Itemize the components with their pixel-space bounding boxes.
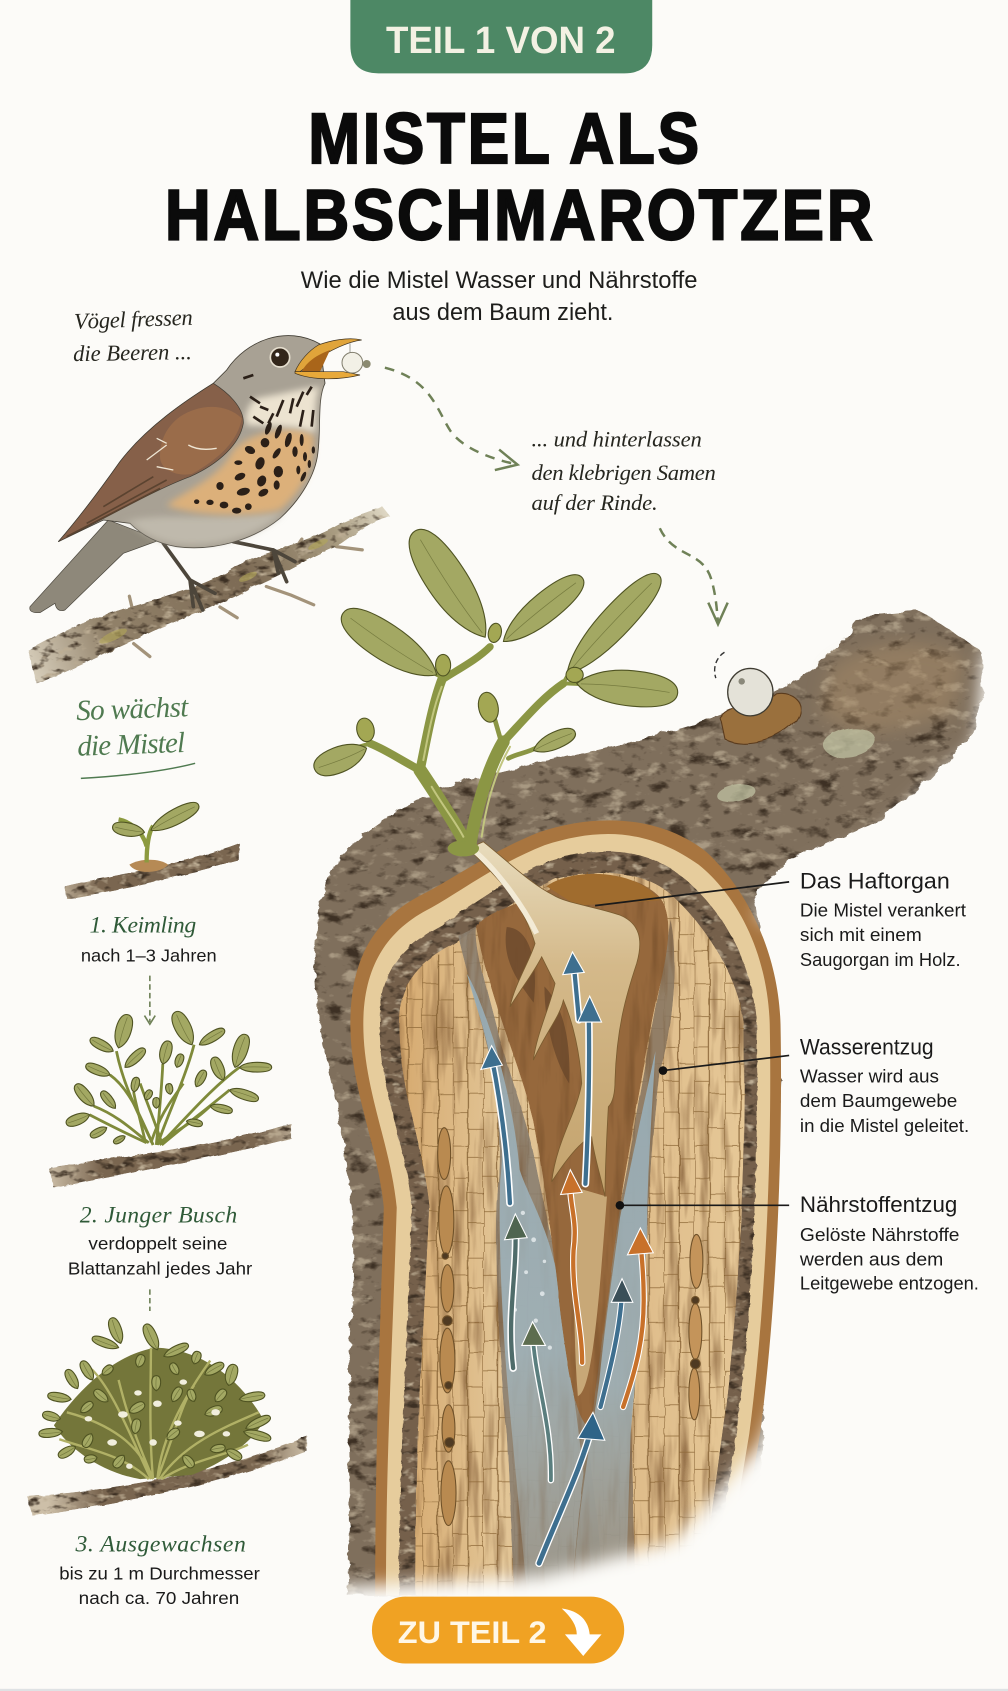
left water channel bbox=[467, 974, 595, 1606]
note: birds eat the berries bbox=[73, 305, 193, 366]
bird throat bbox=[246, 387, 320, 433]
label: Wasserentzug: Wasser wird aus bbox=[800, 1065, 939, 1086]
mistletoe bbox=[310, 520, 679, 856]
outer brown ring bbox=[350, 820, 781, 1596]
bird eye bbox=[270, 348, 290, 367]
bush 2 stems bbox=[89, 1045, 239, 1145]
arrow: stage 1 to 2 bbox=[144, 976, 155, 1024]
bush 3 mass bbox=[54, 1348, 264, 1479]
stage 2 caption: Blattanzahl jedes Jahr bbox=[68, 1258, 252, 1278]
mistletoe leaves bbox=[397, 520, 502, 649]
stage 3 caption bbox=[59, 1531, 260, 1608]
bush 2 branch bbox=[49, 1123, 291, 1188]
badge: Teil 1 von 2: TEIL 1 VON 2 bbox=[386, 19, 616, 61]
stage 3 caption: nach ca. 70 Jahren bbox=[79, 1588, 239, 1608]
label: Naehrstoffentzug: Nährstoffentzug bbox=[800, 1192, 957, 1217]
label: Wasserentzug bbox=[800, 1034, 969, 1136]
badge: Teil 1 von 2 bbox=[350, 0, 652, 73]
title: MISTEL ALS bbox=[308, 100, 702, 179]
stage 2 caption bbox=[68, 1203, 252, 1278]
water speckles bbox=[514, 1211, 552, 1350]
bush 3 branch bbox=[27, 1436, 307, 1516]
label: Das Haftorgan: Das Haftorgan bbox=[800, 868, 950, 893]
title bbox=[165, 100, 875, 255]
stage 3 caption: bis zu 1 m Durchmesser bbox=[59, 1563, 260, 1583]
bird body bbox=[58, 336, 325, 548]
mistletoe stems bbox=[357, 647, 583, 856]
cavity shade bbox=[506, 927, 569, 1083]
label: Naehrstoffentzug bbox=[799, 1192, 979, 1293]
resin chain left bbox=[438, 1128, 456, 1525]
label: Naehrstoffentzug: Leitgewebe entzogen. bbox=[800, 1272, 979, 1293]
cream ring bbox=[363, 834, 770, 1596]
label: Das Haftorgan: Die Mistel verankert bbox=[800, 899, 967, 920]
left grey band bbox=[458, 927, 604, 1606]
arrow: water 8 bbox=[600, 1279, 633, 1407]
stage 3 caption: 3. Ausgewachsen bbox=[74, 1531, 246, 1557]
arrow: water 1 bbox=[481, 1046, 510, 1203]
seed on bark bbox=[720, 668, 800, 743]
note: leave the sticky seed bbox=[531, 426, 716, 515]
note: leave the sticky seed: den klebrigen Samen bbox=[531, 460, 716, 485]
dashed arrow: bird to note bbox=[385, 368, 517, 470]
note: birds eat the berries: die Beeren ... bbox=[73, 339, 192, 366]
arrow: water 3 bbox=[578, 996, 602, 1184]
connector: stage 2 to 3 bbox=[149, 1289, 151, 1311]
leader: Haftorgan bbox=[595, 882, 789, 906]
bird belly bbox=[122, 512, 283, 545]
bush 3 leaves bbox=[106, 1316, 126, 1345]
button: Zu Teil 2: ZU TEIL 2 bbox=[398, 1615, 547, 1650]
stage 3 illustration: mature bush bbox=[27, 1316, 307, 1516]
leader: Naehrstoffentzug bbox=[616, 1201, 789, 1210]
bush 3 berries bbox=[85, 1379, 230, 1469]
title: HALBSCHMAROTZER bbox=[165, 176, 875, 255]
arrow: nutrients 6 bbox=[561, 1170, 582, 1363]
arrow: water 2 bbox=[563, 952, 584, 1020]
resin chain right bbox=[689, 1234, 703, 1420]
bark end tint bbox=[819, 643, 965, 732]
arrow: nutrients 7 bbox=[623, 1228, 653, 1407]
label: Wasserentzug: Wasserentzug bbox=[800, 1034, 934, 1059]
wood cells bbox=[399, 873, 744, 1596]
heading: So waechst die Mistel bbox=[76, 691, 195, 778]
heading: So waechst die Mistel: die Mistel bbox=[77, 727, 186, 763]
bark bbox=[315, 610, 983, 1596]
flow arrows bbox=[481, 952, 653, 1563]
subtitle: Wie die Mistel Wasser und Nährstoffe bbox=[301, 267, 698, 294]
subtitle bbox=[301, 267, 698, 326]
bush 2 leaves bbox=[111, 1013, 135, 1050]
heading: So waechst die Mistel: So wächst bbox=[76, 691, 190, 727]
dark ring bbox=[379, 851, 757, 1596]
subtitle: aus dem Baum zieht. bbox=[392, 299, 613, 326]
right water channel bbox=[571, 1051, 655, 1606]
bird bbox=[30, 336, 371, 613]
trunk cross-section bbox=[315, 610, 983, 1690]
note: birds eat the berries: Vögel fressen bbox=[74, 305, 193, 334]
bird beak bbox=[295, 339, 362, 379]
bird chest bbox=[167, 429, 314, 515]
stage 1 caption: nach 1–3 Jahren bbox=[81, 946, 217, 966]
right grey band bbox=[571, 920, 674, 1606]
arrow: sap 5 bbox=[522, 1322, 551, 1480]
label: Naehrstoffentzug: Gelöste Nährstoffe bbox=[800, 1224, 959, 1245]
label: Wasserentzug: in die Mistel geleitet. bbox=[800, 1115, 969, 1136]
leader: Wasserentzug bbox=[659, 1055, 789, 1075]
label: Das Haftorgan: Saugorgan im Holz. bbox=[800, 949, 961, 970]
lichen patches bbox=[716, 725, 877, 805]
note: leave the sticky seed: ... und hinterlassen bbox=[531, 426, 702, 451]
stage 2 caption: 2. Junger Busch bbox=[80, 1203, 237, 1229]
stage 2 illustration: young bush bbox=[49, 1008, 291, 1188]
bird wing bbox=[58, 383, 243, 542]
cavity bbox=[477, 876, 668, 1428]
stage 2 caption: verdoppelt seine bbox=[88, 1234, 228, 1254]
bird tail bbox=[30, 520, 160, 613]
berry bbox=[342, 343, 371, 373]
note: leave the sticky seed: auf der Rinde. bbox=[531, 490, 658, 515]
branch end fade bbox=[755, 615, 1008, 1024]
stage 1 caption: 1. Keimling bbox=[89, 913, 196, 939]
arrow: sap 4 bbox=[505, 1214, 527, 1368]
label: Naehrstoffentzug: werden aus dem bbox=[799, 1249, 943, 1270]
label: Das Haftorgan bbox=[800, 868, 967, 970]
haustorium lower body bbox=[570, 1186, 607, 1396]
bottom edge strip bbox=[0, 1689, 1008, 1691]
bird chest spots bbox=[194, 375, 315, 514]
stage 1 illustration: seedling bbox=[65, 798, 239, 899]
mistletoe buds bbox=[355, 622, 583, 743]
wood bbox=[399, 873, 744, 1596]
button: Zu Teil 2 bbox=[372, 1597, 624, 1663]
bush 3 stems bbox=[59, 1348, 259, 1479]
label: Das Haftorgan: sich mit einem bbox=[800, 924, 922, 945]
label: Wasserentzug: dem Baumgewebe bbox=[800, 1090, 957, 1111]
haustorium bbox=[468, 842, 640, 1197]
cavity dome bbox=[547, 874, 660, 906]
dashed arrow: note to seed bbox=[660, 528, 728, 678]
arrow: water 9 bbox=[539, 1412, 605, 1563]
stage 1 caption bbox=[81, 913, 217, 966]
branch under bird bbox=[28, 507, 390, 684]
bird legs bbox=[163, 542, 295, 610]
trunk bottom fade bbox=[323, 1348, 852, 1690]
